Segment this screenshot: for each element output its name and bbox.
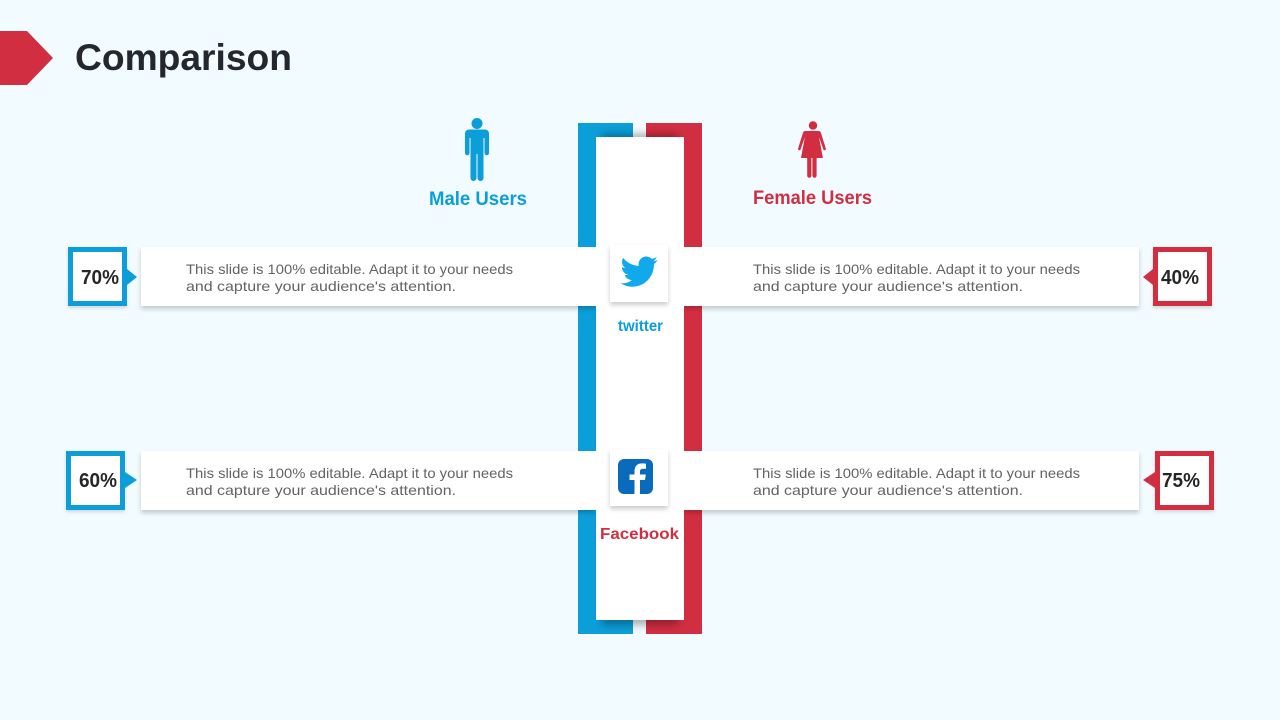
row 1 left panel [141,247,596,306]
row 1 right text [753,261,1080,294]
icon: facebook logo [618,459,653,494]
row 1 right text: This slide is 100% editable. Adapt it to your needs [753,261,1080,277]
icon: male user [465,118,489,181]
label: facebook: Facebook [600,526,679,543]
row 2 left panel [141,451,596,510]
row 1 right panel [684,247,1139,306]
center panel strip over first row [596,240,684,315]
header marker [0,31,53,85]
row 1 left text [186,261,513,294]
row 1 left text: This slide is 100% editable. Adapt it to your needs [186,261,513,277]
title: Comparison [75,37,292,78]
row 2 right text [753,465,1080,498]
red bar [646,123,702,634]
white center panel [596,137,684,620]
row 1 left text: and capture your audience's attention. [186,278,456,294]
label: twitter: twitter [618,318,663,335]
callout: male 60%: 60% [79,470,117,492]
icon tile: facebook [610,449,668,506]
row 2 left text: and capture your audience's attention. [186,482,456,498]
blue bar [578,123,633,634]
icon: female user [798,121,826,178]
callout: female 75%: 75% [1162,470,1200,492]
center column [578,123,702,634]
heading: female users: Female Users [753,188,872,209]
row 2 right text: and capture your audience's attention. [753,482,1023,498]
row 1 right text: and capture your audience's attention. [753,278,1023,294]
callout: female 75% [1143,454,1212,508]
callout: male 70% [70,250,137,304]
row 2 left text: This slide is 100% editable. Adapt it to your needs [186,465,513,481]
callout: male 60% [68,454,137,508]
callout: female 40%: 40% [1161,267,1199,289]
icon: twitter bird [620,256,658,287]
row 2 right panel [684,451,1139,510]
row 2 right text: This slide is 100% editable. Adapt it to your needs [753,465,1080,481]
row 2 left text [186,465,513,498]
heading: male users: Male Users [429,189,527,210]
center panel strip over second row [596,444,684,519]
callout: male 70%: 70% [81,267,119,289]
callout: female 40% [1143,250,1210,304]
icon tile: twitter [610,245,668,302]
